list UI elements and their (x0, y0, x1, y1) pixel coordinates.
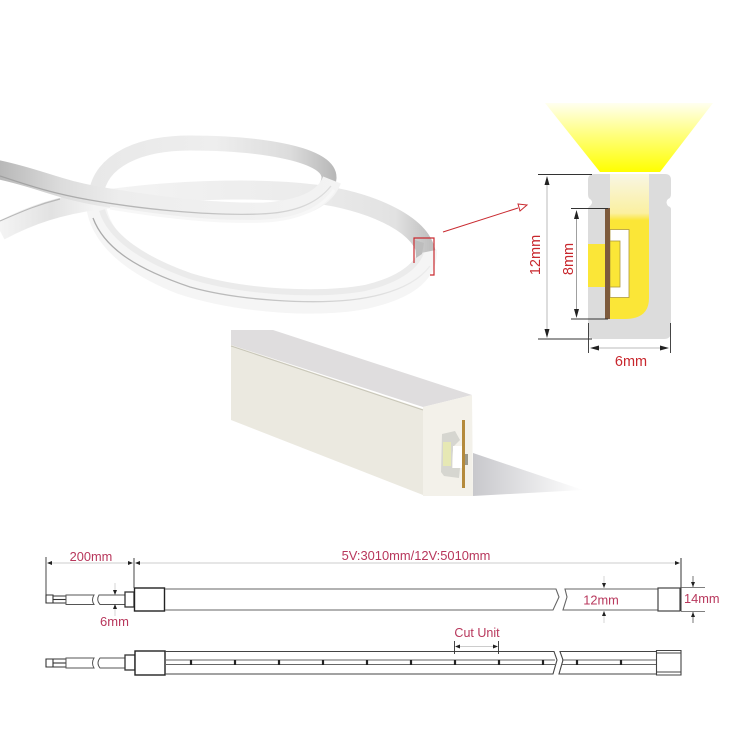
strip outline (165, 652, 656, 674)
lower wiring drawing (46, 650, 681, 675)
lead wire (66, 658, 125, 668)
LED chip (443, 442, 451, 466)
PCB (605, 208, 610, 319)
LED package (610, 230, 629, 298)
small connector (125, 655, 135, 670)
red pointer arrow (443, 204, 527, 232)
14mm connector dimension: 14mm (684, 591, 720, 606)
PCB edge (462, 420, 465, 488)
strip close-up photo (231, 330, 583, 496)
side yellow window (588, 244, 605, 287)
8mm dimension: 8mm (561, 243, 577, 275)
front strip (0, 169, 332, 212)
total length dimension (135, 548, 681, 611)
back band upper edge (0, 199, 60, 221)
yellow light guide (610, 174, 649, 319)
silicone body (588, 174, 671, 339)
component on PCB (465, 454, 468, 465)
main connector (135, 651, 165, 675)
coiled LED strip photo (0, 143, 430, 304)
total length dimension: 5V:3010mm/12V:5010mm (342, 548, 490, 563)
lead wire (66, 595, 125, 604)
grey end patch (415, 240, 424, 258)
cast shadow (473, 453, 583, 496)
back band (0, 190, 426, 252)
cut unit dimension: Cut Unit (454, 626, 500, 640)
top face (231, 330, 472, 407)
upper wiring drawing (46, 588, 680, 611)
12mm strip width dimension: 12mm (583, 592, 619, 608)
strip body (165, 589, 680, 610)
200mm dimension (46, 549, 134, 598)
front strip lower edge highlight (110, 190, 334, 221)
strip inner band (165, 660, 656, 664)
200mm dimension: 200mm (70, 549, 112, 564)
12mm dimension: 12mm (528, 235, 544, 275)
lower ring inner surface (102, 210, 421, 292)
upper loop (96, 143, 329, 211)
6mm cable dimension: 6mm (100, 614, 129, 629)
6mm cable dimension (100, 583, 129, 629)
12mm strip width dimension (583, 576, 619, 623)
small connector (125, 592, 134, 607)
6mm dimension: 6mm (615, 354, 647, 370)
lead wire tip (46, 595, 66, 603)
main connector (134, 588, 164, 611)
edge line (231, 346, 423, 410)
cavity opening (453, 446, 462, 468)
front strip groove (0, 176, 331, 214)
LED cavity (441, 431, 460, 478)
6mm dimension (588, 323, 670, 370)
cut marks (191, 660, 621, 665)
red selection bracket (414, 238, 434, 275)
end cap (656, 650, 681, 675)
cut unit dimension (454, 626, 500, 654)
lower ring groove (93, 218, 430, 302)
side face (231, 345, 423, 495)
LED phosphor (610, 241, 620, 287)
12mm dimension (528, 174, 592, 339)
lower ring of strip (96, 205, 427, 304)
end face (423, 395, 473, 496)
light beam (545, 103, 713, 172)
end cap (658, 588, 680, 611)
8mm dimension (561, 208, 608, 319)
lead wire tip (46, 659, 66, 667)
cross-section diagram (528, 103, 713, 370)
14mm connector dimension (681, 576, 720, 623)
